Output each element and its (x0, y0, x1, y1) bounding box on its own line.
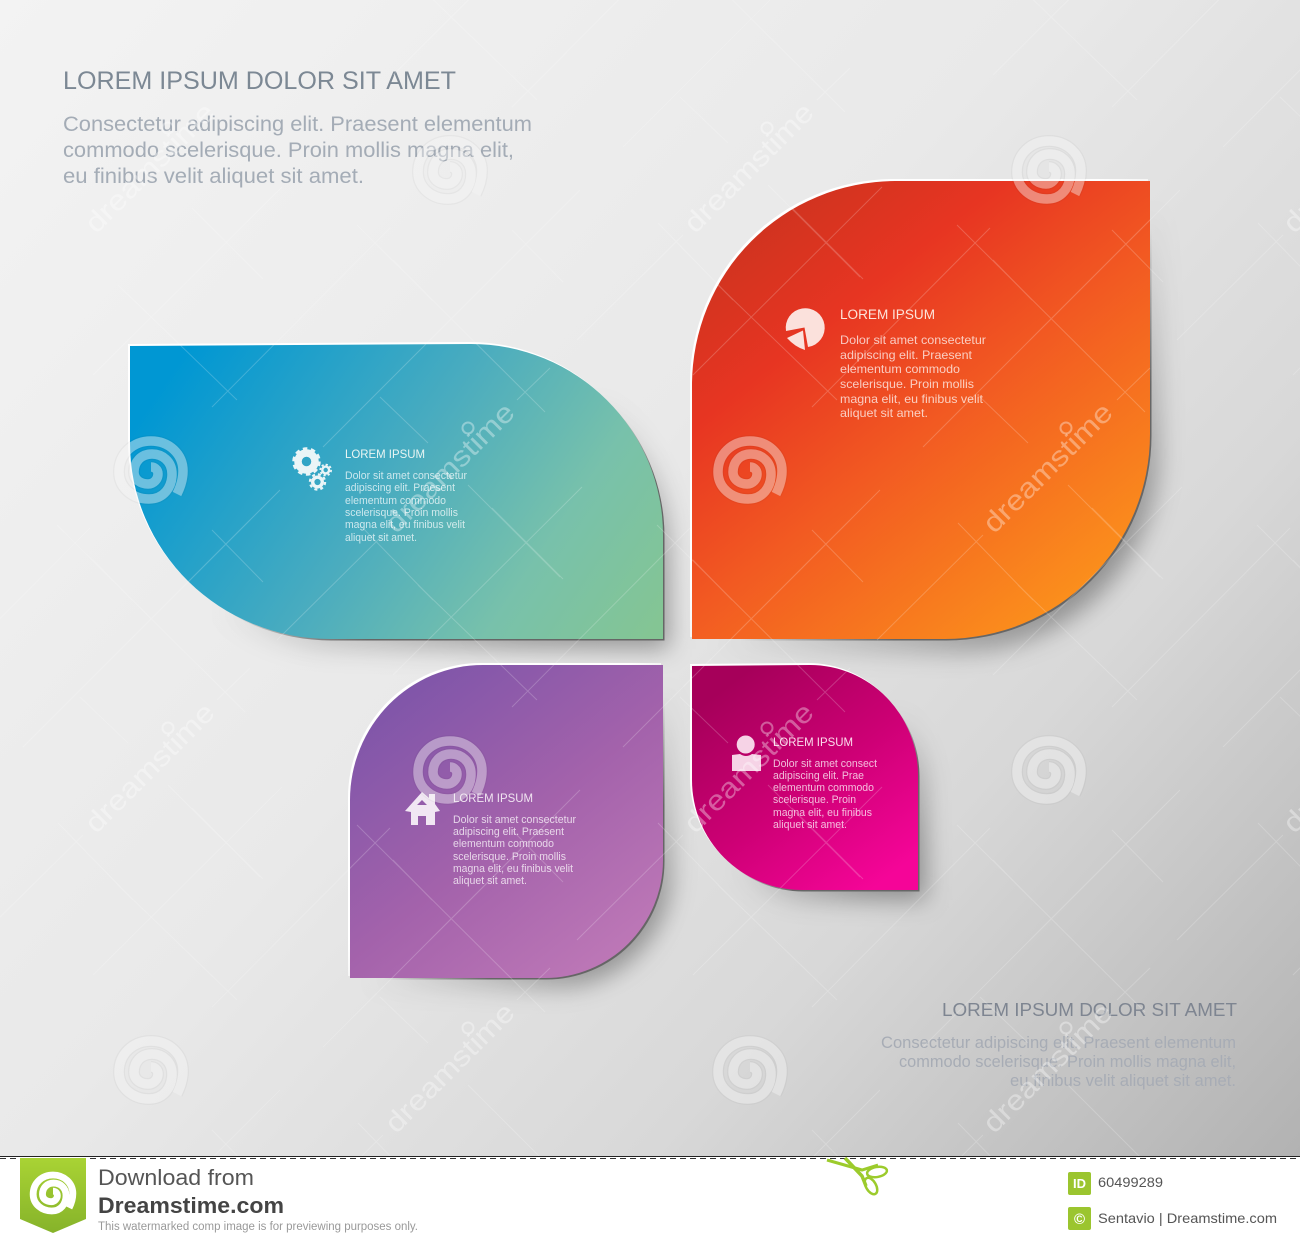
heading: top title: LOREM IPSUM DOLOR SIT AMET (63, 67, 456, 95)
top heading block (63, 67, 532, 188)
text block: red panel (840, 333, 986, 420)
text block: magenta panel: adipiscing elit. Prae (773, 770, 864, 782)
icon: ID badge (1068, 1172, 1091, 1195)
icon: ID badge: ID (1073, 1176, 1086, 1191)
text block: bottom description (881, 1034, 1236, 1090)
text block: purple panel: elementum commodo (453, 838, 554, 850)
text block: red panel: Dolor sit amet consectetur (840, 333, 986, 347)
text block: blue panel: aliquet sit amet. (345, 532, 417, 544)
text: dreamstime.com: Dreamstime.com (98, 1193, 284, 1218)
panel: blue leaf (128, 342, 669, 649)
icon: house (405, 792, 440, 825)
text block: magenta panel: scelerisque. Proin (773, 794, 856, 806)
heading: red panel: LOREM IPSUM (840, 307, 935, 322)
icon: green ribbon badge (20, 1158, 86, 1233)
text block: blue panel: scelerisque. Proin mollis (345, 507, 458, 519)
text block: magenta panel: aliquet sit amet. (773, 819, 847, 831)
text block: blue panel: adipiscing elit. Praesent (345, 482, 455, 494)
text block: blue panel: Dolor sit amet consectetur (345, 470, 467, 482)
text block: blue panel (345, 470, 467, 544)
text block: purple panel (453, 814, 576, 887)
text block: magenta panel: Dolor sit amet consect (773, 758, 877, 770)
heading: magenta panel: LOREM IPSUM (773, 735, 853, 749)
icon: copyright badge (1068, 1207, 1091, 1230)
icon: gears (294, 449, 331, 490)
text block: bottom description: commodo scelerisque. Proin mollis magna elit, (899, 1053, 1236, 1071)
icon: copyright badge: © (1074, 1211, 1085, 1228)
text block: bottom description: Consectetur adipiscing elit. Praesent elementum (881, 1034, 1236, 1052)
text block: bottom description: eu finibus velit aliquet sit amet. (1010, 1072, 1236, 1090)
text block: purple panel: adipiscing elit. Praesent (453, 826, 564, 838)
icon: scissors (827, 1158, 888, 1196)
text: image id: 60499289 (1098, 1174, 1163, 1190)
icon: person (732, 736, 761, 771)
text block: top description (63, 112, 532, 188)
heading: bottom title: LOREM IPSUM DOLOR SIT AMET (942, 999, 1237, 1020)
text block: purple panel: magna elit, eu finibus velit (453, 863, 573, 875)
panel: purple leaf (348, 663, 672, 988)
text block: red panel: scelerisque. Proin mollis (840, 377, 974, 391)
text block: top description: commodo scelerisque. Proin mollis magna elit, (63, 138, 514, 162)
text: preview note: This watermarked comp image is for previewing purposes only. (98, 1221, 418, 1233)
text block: red panel: aliquet sit amet. (840, 406, 928, 420)
text block: top description: eu finibus velit aliquet sit amet. (63, 164, 364, 188)
panel: magenta leaf (690, 663, 926, 900)
text block: blue panel: magna elit, eu finibus velit (345, 519, 465, 531)
text block: red panel: adipiscing elit. Praesent (840, 348, 973, 362)
text block: purple panel: Dolor sit amet consectetur (453, 814, 576, 826)
text block: blue panel: elementum commodo (345, 495, 446, 507)
text: download from: Download from (98, 1165, 254, 1190)
text block: magenta panel: elementum commodo (773, 782, 874, 794)
text block: purple panel: aliquet sit amet. (453, 875, 527, 887)
text block: top description: Consectetur adipiscing elit. Praesent elementum (63, 112, 532, 136)
text block: magenta panel: magna elit, eu finibus (773, 807, 872, 819)
icon: pie chart (786, 308, 825, 350)
text block: red panel: magna elit, eu finibus velit (840, 392, 984, 406)
text block: purple panel: scelerisque. Proin mollis (453, 851, 566, 863)
panel: red-orange leaf (690, 179, 1160, 653)
heading: purple panel: LOREM IPSUM (453, 791, 533, 805)
text: author credit: Sentavio | Dreamstime.com (1098, 1210, 1277, 1226)
bottom right text block (881, 999, 1237, 1090)
text block: red panel: elementum commodo (840, 362, 960, 376)
heading: blue panel: LOREM IPSUM (345, 447, 425, 461)
text block: magenta panel (773, 758, 877, 831)
footer bar (0, 1156, 1300, 1246)
